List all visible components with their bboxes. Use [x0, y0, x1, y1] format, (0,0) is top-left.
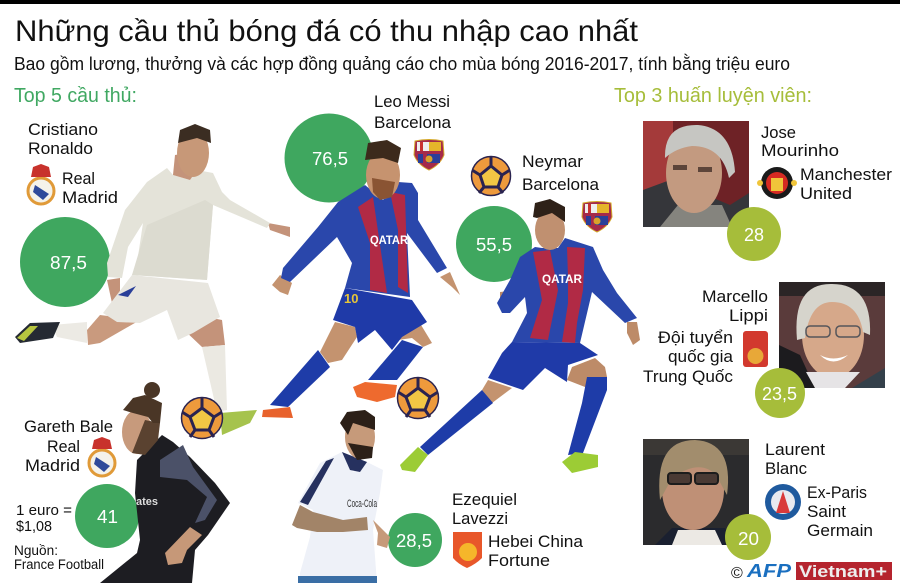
- logo: Barcelona (Messi): [414, 140, 444, 170]
- Ronaldo: label: Cristiano: [28, 120, 98, 139]
- note: exchange rate: 1 euro =: [16, 502, 72, 519]
- value circle: Ronaldo: [20, 217, 110, 307]
- heading: top 3 coaches: Top 3 huấn luyện viên:: [614, 85, 812, 107]
- Neymar: label: Barcelona: [522, 175, 600, 194]
- football: Neymar: [471, 156, 511, 196]
- note: exchange rate: $1,08: [16, 518, 52, 535]
- Blanc: label: Laurent: [765, 440, 825, 459]
- value circle: Blanc: 20: [738, 529, 759, 549]
- Mourinho: label: Jose: [761, 123, 796, 142]
- subtitle: Bao gồm lương, thưởng và các hợp đồng quảng cáo cho mùa bóng 2016-2017, tính bằng triệu euro: [14, 53, 790, 74]
- note: exchange rate: [16, 502, 72, 535]
- value circle: Lavezzi: [388, 513, 442, 567]
- Bale: label: Gareth Bale: [24, 417, 113, 436]
- player: Lavezzi: [292, 410, 390, 583]
- coach photo: Lippi: [779, 282, 885, 388]
- Lippi: label: Marcello: [702, 287, 768, 306]
- Blanc: label: [765, 440, 873, 540]
- Blanc: label: Saint: [807, 502, 846, 521]
- value circle: Blanc: [725, 514, 771, 560]
- Lavezzi: label: [452, 490, 584, 570]
- value circle: Mourinho: 28: [744, 225, 764, 245]
- player: Bale: ates: [136, 496, 158, 508]
- Ronaldo: label: Madrid: [62, 188, 118, 207]
- Ronaldo: label: Ronaldo: [28, 139, 93, 158]
- credit: AFP Vietnam: ©: [731, 565, 743, 582]
- value circle: Messi: 76,5: [312, 149, 348, 169]
- note: source: France Football: [14, 557, 104, 572]
- Blanc: label: Germain: [807, 521, 873, 540]
- logo: Manchester United: [757, 167, 797, 199]
- value circle: Lippi: 23,5: [762, 384, 797, 404]
- Blanc: label: Blanc: [765, 459, 807, 478]
- logo: Real Madrid (Ronaldo): [28, 164, 54, 204]
- logo: Paris Saint-Germain: [765, 484, 801, 520]
- value circle: Mourinho: [727, 207, 781, 261]
- Messi: label: Leo Messi: [374, 92, 450, 111]
- heading: top 5 players: Top 5 cầu thủ:: [14, 85, 137, 107]
- player: Neymar: QATAR: [542, 272, 582, 286]
- Messi: label: Barcelona: [374, 113, 452, 132]
- Lavezzi: label: Hebei China: [488, 532, 584, 551]
- player: Bale: [100, 382, 230, 583]
- Lavezzi: label: Ezequiel: [452, 490, 517, 509]
- football: beside Messi's boot: [397, 377, 439, 419]
- Mourinho: label: United: [800, 184, 852, 203]
- Bale: label: [24, 417, 113, 475]
- logo: Hebei China Fortune: [453, 532, 482, 568]
- note: source: [14, 543, 104, 572]
- credit: AFP Vietnam: Vietnam+: [799, 562, 887, 581]
- Mourinho: label: [761, 123, 892, 203]
- player: Messi: [262, 140, 460, 418]
- player: Lavezzi: Coca-Cola: [347, 498, 378, 510]
- Ronaldo: label: Real: [62, 169, 95, 188]
- value circle: Ronaldo: 87,5: [50, 253, 87, 273]
- Bale: label: Real: [47, 437, 80, 456]
- Lavezzi: label: Lavezzi: [452, 509, 508, 528]
- title: Những cầu thủ bóng đá có thu nhập cao nhất: [15, 15, 639, 48]
- Lippi: label: [643, 287, 768, 386]
- coach photo: Mourinho: [643, 121, 749, 227]
- value circle: Lavezzi: 28,5: [396, 531, 432, 551]
- value circle: Neymar: 55,5: [476, 235, 512, 255]
- football: under Ronaldo's boot: [181, 397, 223, 439]
- value circle: Bale: [75, 484, 139, 548]
- credit: AFP Vietnam: [731, 561, 892, 582]
- value circle: Lippi: [755, 368, 805, 418]
- value circle: Bale: 41: [97, 507, 118, 527]
- Mourinho: label: Mourinho: [761, 141, 839, 160]
- credit: AFP Vietnam: AFP: [746, 561, 792, 581]
- Lippi: label: Trung Quốc: [643, 367, 733, 386]
- Ronaldo: label: [28, 120, 118, 207]
- logo: China FA: [743, 331, 768, 367]
- Lippi: label: quốc gia: [668, 347, 734, 366]
- Bale: label: Madrid: [25, 456, 80, 475]
- player: Messi: QATAR: [370, 233, 408, 247]
- Lippi: label: Đội tuyển: [658, 328, 733, 347]
- player: Ronaldo: [15, 124, 290, 435]
- Messi: label: [374, 92, 452, 132]
- logo: Barcelona (Neymar): [582, 202, 612, 232]
- Neymar: label: [522, 152, 600, 194]
- logo: Real Madrid (Bale): [89, 437, 115, 476]
- Mourinho: label: Manchester: [800, 165, 892, 184]
- note: source: Nguồn:: [14, 543, 58, 558]
- Neymar: label: Neymar: [522, 152, 583, 171]
- Lavezzi: label: Fortune: [488, 551, 550, 570]
- player: Messi: 10: [344, 291, 358, 306]
- Lippi: label: Lippi: [729, 306, 768, 325]
- value circle: Neymar: [456, 206, 532, 282]
- value circle: Messi: [284, 114, 374, 202]
- coach photo: Blanc: [643, 439, 749, 545]
- player: Neymar: [400, 199, 640, 473]
- Blanc: label: Ex-Paris: [807, 483, 867, 502]
